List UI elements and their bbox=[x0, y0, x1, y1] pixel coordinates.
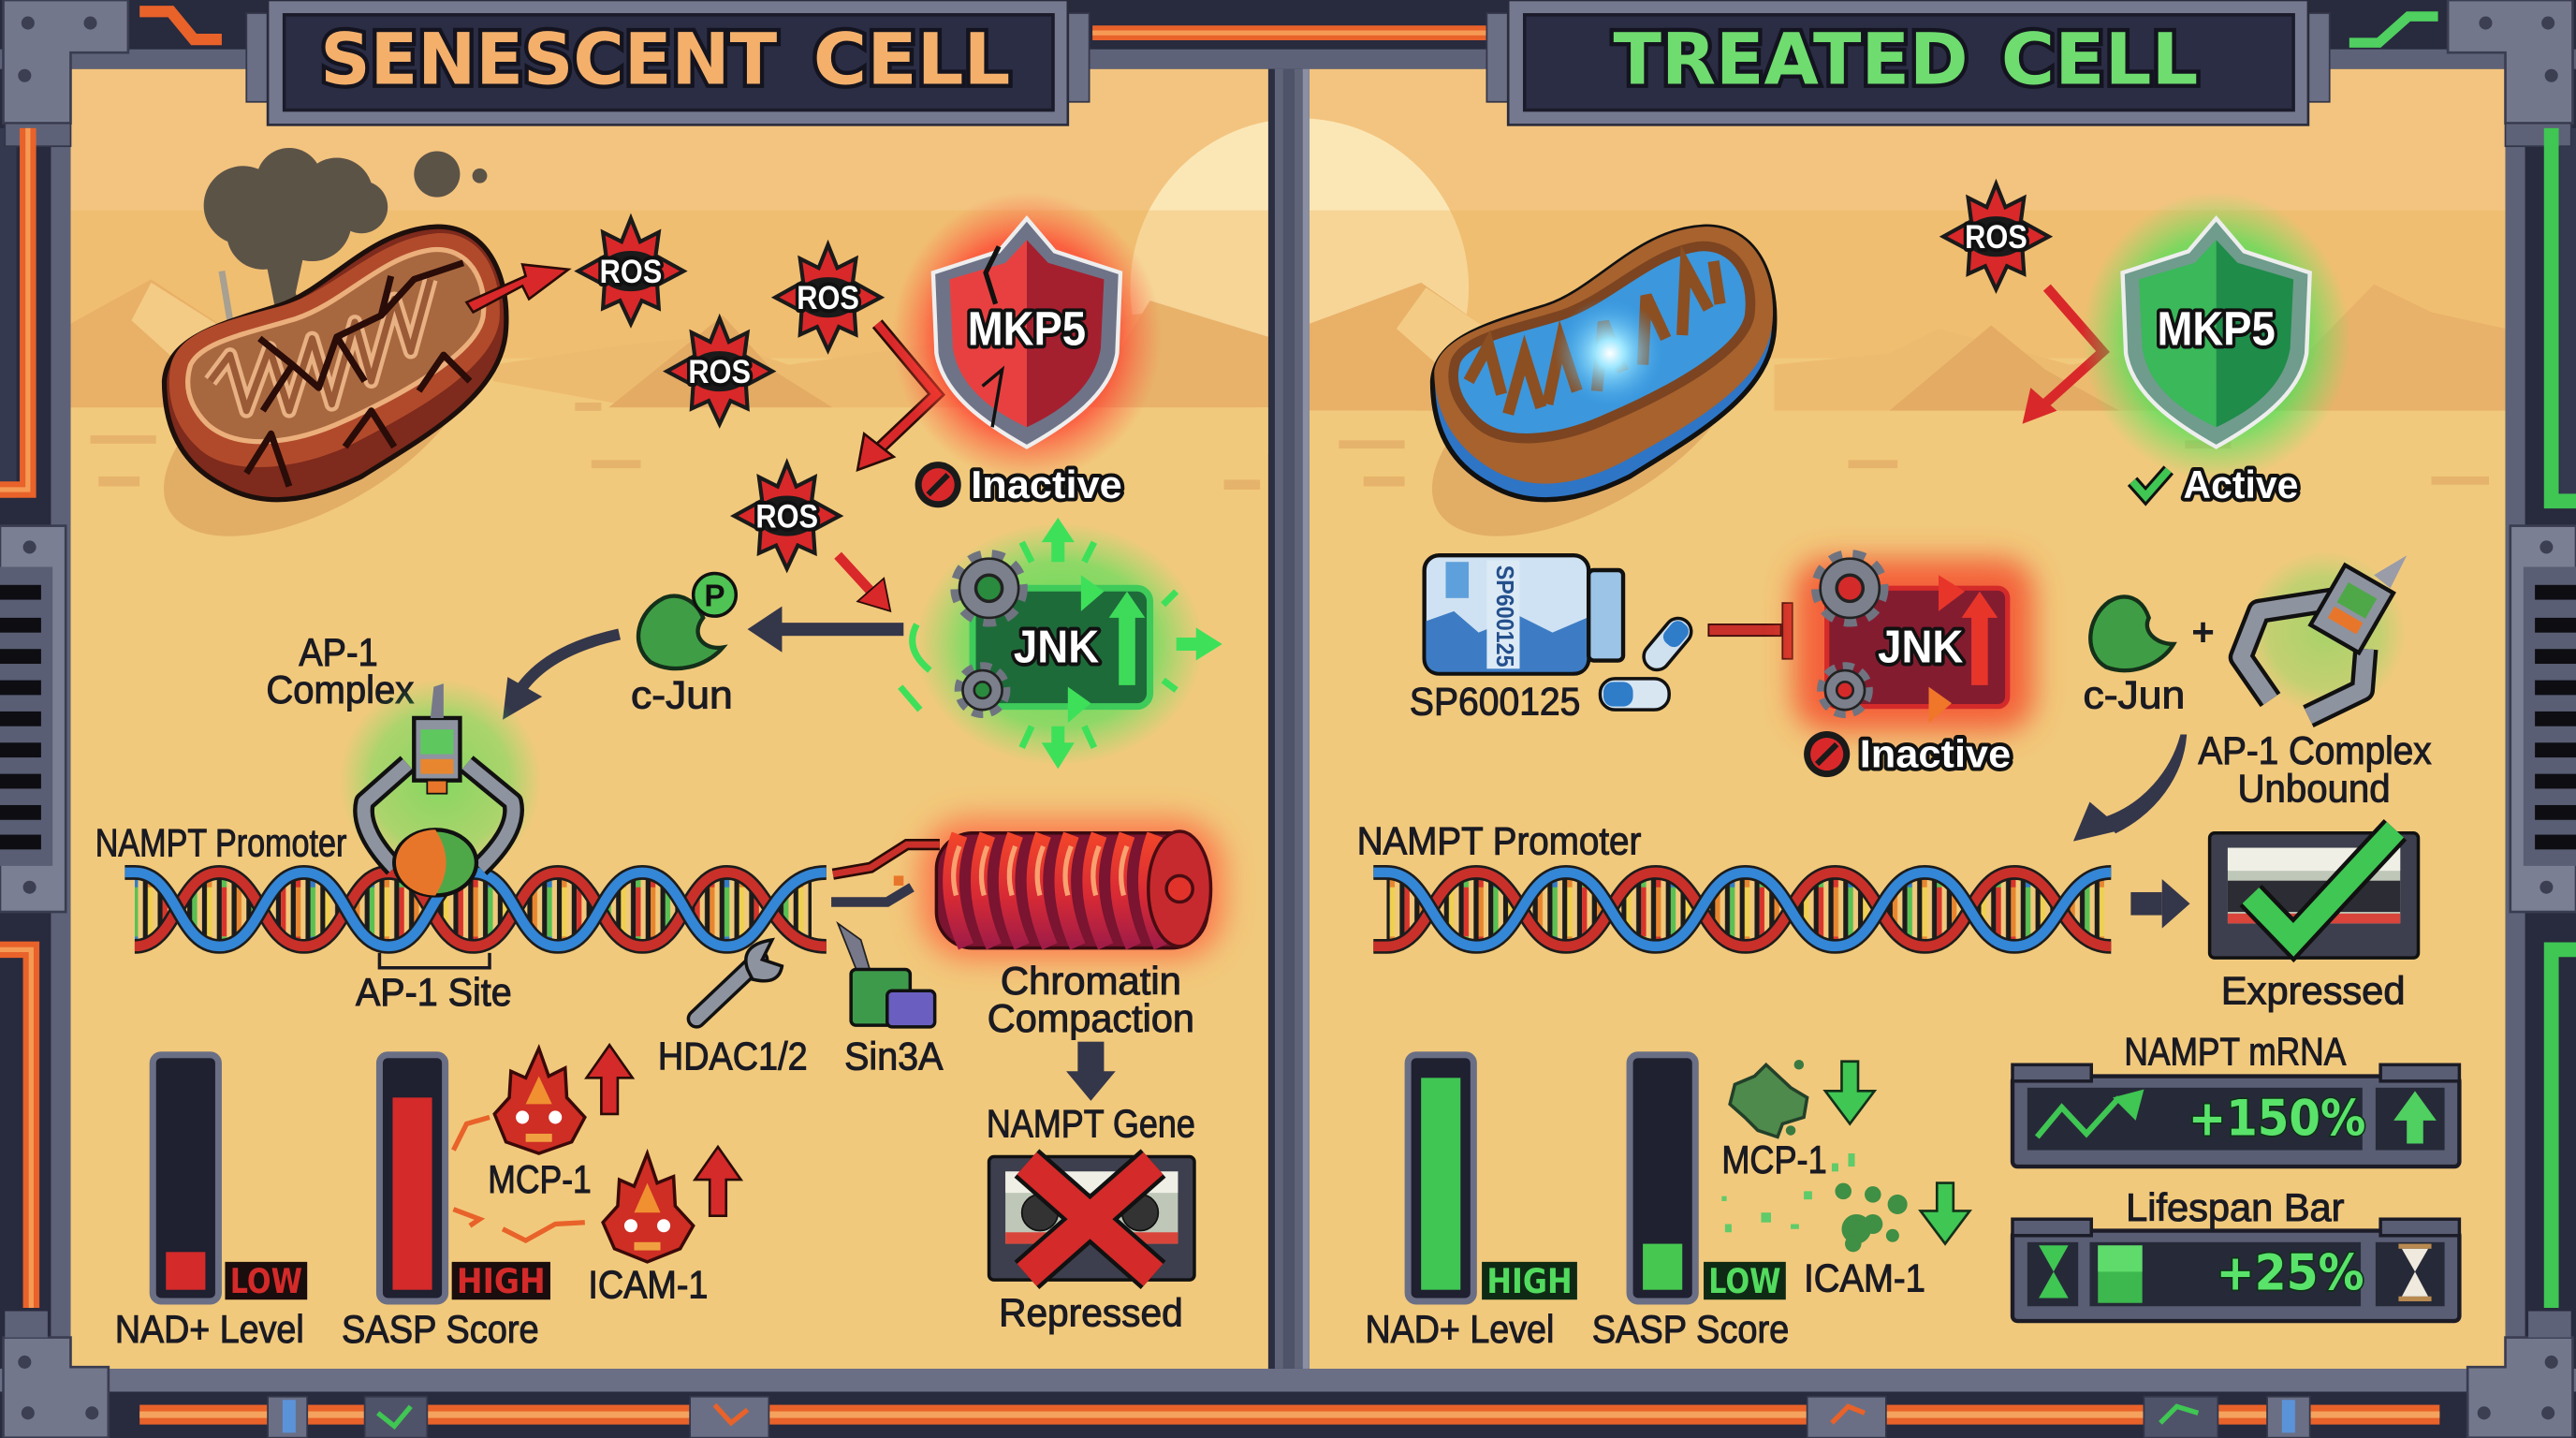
readout: lifespan bar bbox=[2012, 1185, 2459, 1321]
ROS burst 1 bbox=[578, 218, 683, 324]
status: inactive right bbox=[1804, 731, 2011, 777]
pipes: bottom strip bbox=[139, 1397, 2439, 1438]
ROS burst 2 bbox=[775, 244, 881, 350]
capsule bbox=[1600, 679, 1669, 710]
label: AP-1 complex unbound: Unbound bbox=[2237, 766, 2391, 810]
gear small bbox=[1823, 668, 1866, 712]
label: chromatin compaction: Chromatin bbox=[1001, 959, 1181, 1003]
flame: MCP-1 bbox=[488, 1045, 633, 1201]
gauge: NAD+ level high: HIGH bbox=[1486, 1261, 1573, 1301]
gauge: NAD+ level high: NAD+ Level bbox=[1365, 1307, 1554, 1351]
c-Jun phosphorylated: P bbox=[704, 580, 725, 614]
cytokine squiggles bbox=[453, 1117, 585, 1240]
drug bottle SP600125 bbox=[1410, 555, 1696, 723]
left panel: desert background bbox=[71, 69, 1268, 1369]
MCP-1 dissolving: MCP-1 bbox=[1721, 1137, 1827, 1181]
block: Sin3A: Sin3A bbox=[844, 1034, 943, 1078]
shield: MKP5 inactive bbox=[892, 192, 1162, 481]
flame: ICAM-1 bbox=[588, 1147, 741, 1306]
status: inactive right: Inactive bbox=[1860, 732, 2011, 776]
ROS burst 3 bbox=[666, 318, 772, 424]
frame: right vent clamp bbox=[2510, 526, 2576, 912]
damaged mitochondrion bbox=[128, 227, 509, 581]
cassette repressed: Repressed bbox=[999, 1290, 1183, 1334]
title text bbox=[1614, 19, 2198, 101]
arrow: mitochondrion to ROS bbox=[466, 265, 568, 312]
connector: red strand to chromatin bbox=[831, 844, 940, 902]
label: AP-1 complex: AP-1 bbox=[299, 630, 378, 674]
arrow up bbox=[587, 1045, 633, 1114]
pipes: orange left bbox=[0, 11, 1486, 1308]
JNK inactive: JNK bbox=[1878, 622, 1964, 672]
c-Jun unbound bbox=[2083, 597, 2185, 716]
frame: top corner right bbox=[2448, 0, 2572, 146]
shield: MKP5 active: MKP5 bbox=[2157, 302, 2276, 356]
arrow: ROS to JNK bbox=[838, 555, 890, 611]
readout: NAMPT mRNA bbox=[2012, 1029, 2459, 1167]
arrow down to gene bbox=[1066, 1042, 1116, 1101]
cassette repressed bbox=[989, 1157, 1194, 1334]
title text bbox=[320, 19, 1010, 101]
ROS burst 4 bbox=[734, 463, 840, 568]
AP-1 claw open bbox=[2241, 550, 2407, 716]
gauge: SASP score low bbox=[1592, 1055, 1789, 1351]
healthy mitochondrion bbox=[1397, 227, 1778, 581]
shield: MKP5 inactive: MKP5 bbox=[968, 302, 1086, 356]
readout: NAMPT mRNA: NAMPT mRNA bbox=[2124, 1029, 2346, 1073]
AP-1 site bracket bbox=[356, 953, 512, 1014]
JNK active bbox=[900, 518, 1222, 769]
ROS burst right bbox=[1943, 183, 2049, 289]
DNA helix left bbox=[124, 865, 827, 954]
label: c-Jun bbox=[631, 672, 733, 716]
label: AP-1 complex unbound: AP-1 Complex bbox=[2198, 728, 2432, 772]
arrow up bbox=[695, 1147, 741, 1216]
arrow: JNK to c-Jun bbox=[748, 607, 903, 653]
gauge: NAD+ level low: LOW bbox=[230, 1261, 302, 1301]
flame: MCP-1: MCP-1 bbox=[488, 1157, 592, 1201]
arrow down bbox=[1825, 1062, 1875, 1123]
hourglass bbox=[2398, 1244, 2432, 1301]
gear small bbox=[961, 668, 1003, 712]
arrow: DNA to expressed gene bbox=[2130, 879, 2190, 929]
label: NAMPT promoter left: NAMPT Promoter bbox=[95, 820, 346, 864]
gear large bbox=[958, 557, 1020, 620]
readout: lifespan bar: +25% bbox=[2217, 1245, 2364, 1302]
gauge: SASP score high: SASP Score bbox=[342, 1307, 539, 1351]
readout: lifespan bar: Lifespan Bar bbox=[2126, 1185, 2345, 1229]
JNK active: JNK bbox=[1014, 622, 1100, 672]
readout: NAMPT mRNA: +150% bbox=[2188, 1091, 2365, 1148]
label: chromatin compaction: Compaction bbox=[988, 996, 1194, 1040]
shield: MKP5 active bbox=[2082, 192, 2351, 481]
AP-1 site bracket: AP-1 Site bbox=[356, 970, 512, 1014]
pills bbox=[1638, 613, 1696, 675]
ROS burst 2: ROS bbox=[797, 280, 859, 316]
flame: ICAM-1: ICAM-1 bbox=[588, 1262, 708, 1306]
bound ball bbox=[394, 829, 476, 895]
title text: CELL bbox=[2001, 19, 2198, 101]
ROS burst 1: ROS bbox=[600, 254, 662, 290]
drug bottle SP600125: SP600125 bbox=[1491, 565, 1519, 668]
frame: left vent clamp bbox=[0, 526, 66, 912]
title text: CELL bbox=[813, 19, 1010, 101]
chromatin coil bbox=[920, 818, 1224, 960]
label: chromatin compaction bbox=[988, 959, 1194, 1040]
frame: bottom corner left bbox=[4, 1312, 109, 1438]
label: NAMPT promoter right: NAMPT Promoter bbox=[1357, 819, 1641, 863]
title text: TREATED bbox=[1614, 19, 1969, 101]
curved arrow to DNA bbox=[2073, 736, 2185, 842]
DNA helix right bbox=[1373, 865, 2112, 954]
wrench: HDAC1/2: HDAC1/2 bbox=[658, 1034, 808, 1078]
gauge: NAD+ level high bbox=[1365, 1055, 1577, 1351]
smoke plume bbox=[204, 148, 487, 348]
curved arrow: c-Jun to AP-1 bbox=[503, 634, 620, 720]
label: AP-1 complex unbound bbox=[2198, 728, 2432, 810]
ROS burst 4: ROS bbox=[755, 498, 818, 535]
block: Sin3A bbox=[838, 923, 943, 1078]
status: inactive left bbox=[915, 462, 1122, 507]
bent red arrow right bbox=[2023, 287, 2103, 424]
inhibition bar bbox=[1708, 603, 1793, 659]
right panel: desert background bbox=[1309, 69, 2505, 1369]
gauge: NAD+ level low: NAD+ Level bbox=[115, 1307, 304, 1351]
center divider bbox=[1268, 69, 1310, 1369]
status: active bbox=[2132, 462, 2298, 506]
pipes: green right bbox=[2349, 17, 2576, 1308]
gauge: NAD+ level low bbox=[115, 1055, 307, 1351]
gauge: SASP score high bbox=[342, 1055, 550, 1351]
frame: top corner left bbox=[4, 0, 128, 146]
arrow down bbox=[1921, 1183, 1969, 1244]
title plate: treated cell bbox=[1486, 0, 2330, 125]
gauge: SASP score high: HIGH bbox=[457, 1261, 546, 1301]
label: AP-1 complex: Complex bbox=[266, 668, 414, 712]
JNK inactive bbox=[1794, 557, 2034, 731]
ICAM-1 dissolving bbox=[1721, 1153, 1969, 1299]
plus sign: + bbox=[2191, 610, 2215, 654]
ROS burst right: ROS bbox=[1965, 219, 2027, 256]
cassette expressed bbox=[2210, 829, 2419, 1012]
MCP-1 dissolving bbox=[1721, 1060, 1875, 1181]
wrench: HDAC1/2 bbox=[658, 940, 808, 1078]
gauge: SASP score low: SASP Score bbox=[1592, 1307, 1789, 1351]
bent red arrow left bbox=[857, 324, 936, 470]
label: AP-1 complex bbox=[266, 630, 414, 712]
ROS bursts left bbox=[578, 218, 881, 568]
title text: SENESCENT bbox=[320, 19, 778, 101]
cassette expressed: Expressed bbox=[2221, 968, 2405, 1012]
AP-1 claw bound to promoter bbox=[339, 679, 542, 895]
status: active: Active bbox=[2184, 462, 2298, 506]
c-Jun phosphorylated bbox=[631, 574, 736, 716]
ICAM-1 dissolving: ICAM-1 bbox=[1804, 1255, 1925, 1299]
title plate: senescent cell bbox=[246, 0, 1090, 125]
drug bottle SP600125: SP600125 bbox=[1410, 679, 1580, 723]
c-Jun unbound: c-Jun bbox=[2083, 672, 2185, 716]
ROS burst 3: ROS bbox=[688, 354, 751, 390]
label: NAMPT gene: NAMPT Gene bbox=[987, 1101, 1195, 1145]
gear large bbox=[1819, 557, 1881, 620]
status: inactive left: Inactive bbox=[971, 462, 1122, 506]
frame: bottom corner right bbox=[2467, 1312, 2572, 1438]
gauge: SASP score low: LOW bbox=[1708, 1261, 1781, 1301]
